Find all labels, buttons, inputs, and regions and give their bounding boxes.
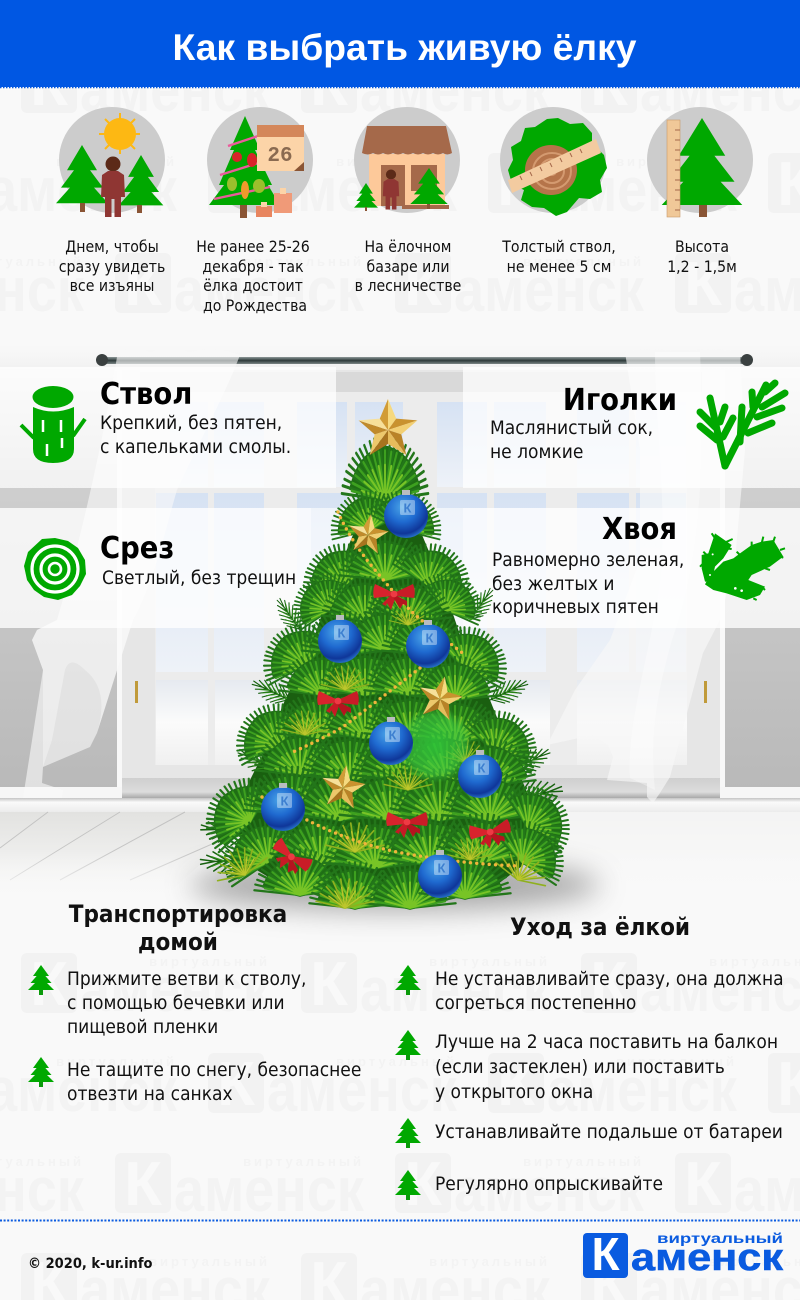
panel: pine needles: Равномерно зеленая, [492, 549, 684, 571]
stars [319, 399, 466, 809]
logo: виртуальный [657, 1230, 783, 1246]
panel: needles: не ломкие [490, 441, 583, 463]
caption: height: 1,2 - 1,5м [667, 257, 737, 276]
panel: trunk: Ствол [100, 377, 192, 412]
caption: date: Не ранее 25-26 [196, 237, 310, 256]
icon: decorated tree and calendar: 26 [267, 145, 293, 168]
caption: when to buy: Днем, чтобы [65, 237, 159, 256]
icon: sprig [700, 533, 785, 600]
panel: cut: Срез [100, 531, 174, 566]
icon: tree cut [24, 538, 86, 600]
caption: when to buy: все изъяны [70, 276, 154, 295]
blue ornaments [261, 490, 502, 898]
icon: trunk [21, 386, 85, 463]
list: transport tips: пищевой пленки [67, 1016, 218, 1038]
heading: care: Уход за ёлкой [510, 913, 690, 941]
caption: when to buy: сразу увидеть [59, 257, 165, 276]
needle tufts [189, 438, 585, 910]
heading: transport home: домой [138, 928, 218, 956]
caption: where: базаре или [366, 257, 450, 276]
list: care tips [395, 965, 784, 1200]
caption: where: На ёлочном [365, 237, 451, 256]
list: transport tips [28, 965, 361, 1105]
list: care tips: (если застеклен) или поставить [435, 1056, 725, 1078]
panel: needles: Иголки [563, 383, 677, 418]
bows [265, 584, 513, 882]
list: transport tips: с помощью бечевки или [67, 992, 285, 1014]
glow patch [397, 707, 473, 783]
floor shadow of tree [190, 859, 600, 911]
list: care tips: Лучше на 2 часа поставить на балкон [435, 1031, 778, 1053]
window scene background [0, 345, 800, 915]
panel: trunk: Крепкий, без пятен, [100, 412, 282, 434]
edge branches [199, 584, 565, 875]
copyright: © 2020, k-ur.info [28, 1256, 153, 1272]
icon: decorated tree and calendar [207, 107, 313, 218]
icon: branch [700, 383, 785, 466]
list: care tips: Не устанавливайте сразу, она должна [435, 968, 784, 990]
curtains [23, 349, 745, 803]
list: care tips: Регулярно опрыскивайте [435, 1173, 663, 1195]
icon: forest in daytime [56, 107, 165, 217]
caption: date: декабря - так [202, 257, 304, 276]
panel: pine needles: без желтых и [492, 573, 615, 595]
panel: trunk [21, 377, 291, 463]
panel: needles: Маслянистый сок, [490, 417, 653, 439]
logo: аменск [631, 1237, 784, 1279]
icon: tree market house [354, 107, 460, 213]
caption: trunk thickness: Толстый ствол, [501, 237, 616, 256]
illustration: christmas tree [189, 399, 585, 910]
logo: К [591, 1228, 620, 1280]
title banner: Как выбрать живую ёлку [172, 26, 637, 68]
list: transport tips: Не тащите по снегу, безопаснее [67, 1059, 361, 1081]
caption: where: в лесничестве [355, 276, 461, 295]
caption: height: Высота [675, 237, 729, 256]
list: transport tips: отвезти на санках [67, 1083, 233, 1105]
heading: transport home: Транспортировка [69, 900, 287, 928]
panel: pine needles [492, 512, 785, 618]
panel: cut: Светлый, без трещин [102, 567, 296, 589]
panel: pine needles: коричневых пятен [492, 596, 659, 618]
icon: height with ruler [647, 107, 753, 217]
list: care tips: Устанавливайте подальше от батареи [435, 1121, 783, 1143]
list: transport tips: Прижмите ветви к стволу, [67, 968, 306, 990]
dotted divider [0, 1220, 800, 1222]
list: care tips: у открытого окна [435, 1081, 593, 1103]
curtain rod [96, 354, 753, 366]
garlands [262, 512, 520, 866]
panel: pine needles: Хвоя [602, 512, 677, 547]
caption: trunk thickness: не менее 5 см [507, 257, 611, 276]
panel: cut [24, 531, 296, 600]
tree body [240, 450, 530, 905]
list: care tips: согреться постепенно [435, 992, 636, 1014]
panel: trunk: с капельками смолы. [100, 436, 291, 458]
logo [583, 1228, 784, 1280]
caption: date: ёлка достоит [203, 276, 303, 295]
panel: needles [490, 383, 785, 466]
yellow needle highlights [209, 606, 554, 908]
caption: date: до Рождества [203, 296, 307, 315]
icon: thick trunk with ruler [500, 107, 607, 216]
title banner [0, 0, 800, 88]
translucent text panels [0, 367, 800, 628]
